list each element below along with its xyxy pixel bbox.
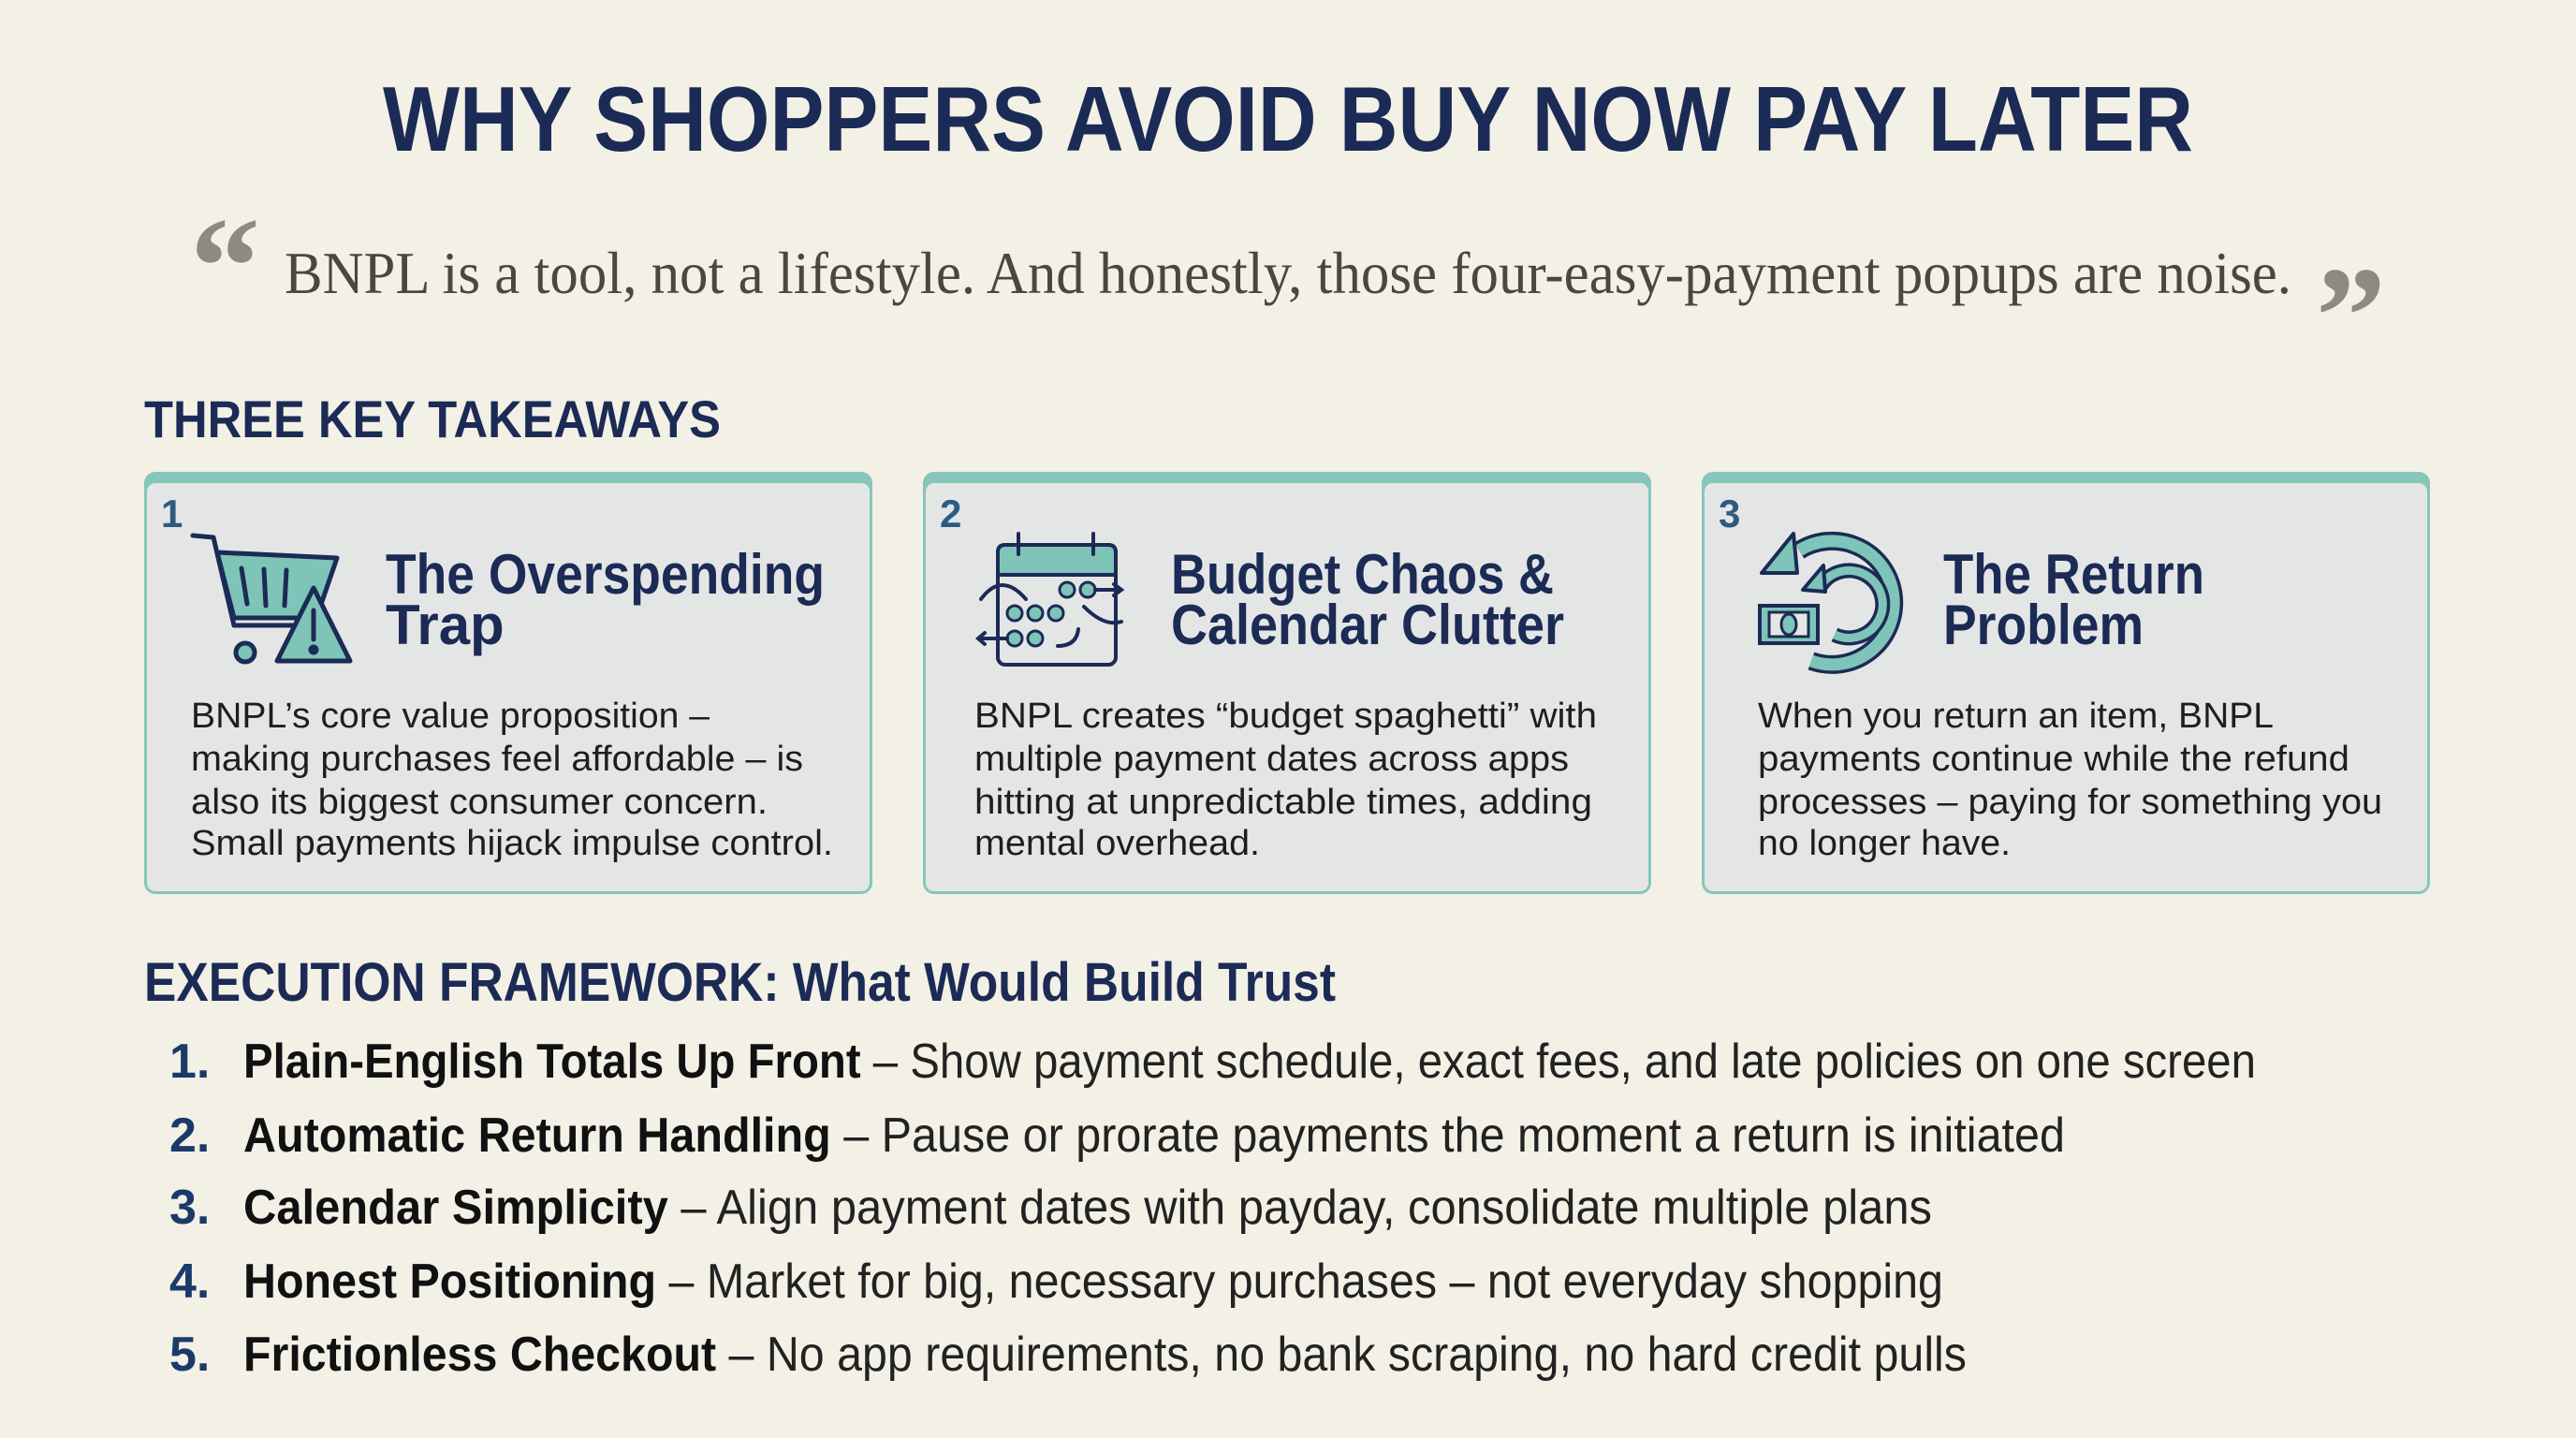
panel: return problem: [1702, 472, 2430, 894]
card body text: payments continue while the refund: [1758, 740, 2349, 779]
card body text: no longer have.: [1758, 824, 2011, 863]
numbered list: framework steps: Calendar Simplicity – Align payment dates with payday, consolidate multiple plans: [243, 1181, 1932, 1235]
card body text: also its biggest consumer concern.: [191, 783, 768, 822]
card body text: multiple payment dates across apps: [974, 740, 1569, 779]
card body text: hitting at unpredictable times, adding: [974, 783, 1592, 822]
numbered list: framework steps: [169, 1034, 2256, 1382]
numbered list: framework steps: 2.: [169, 1108, 210, 1163]
icon: calendar with scattered payments: [978, 534, 1121, 665]
numbered list: framework steps: Frictionless Checkout – No app requirements, no bank scraping, no hard credit pulls: [243, 1328, 1967, 1382]
card title: Problem: [1943, 594, 2144, 656]
icon: open quote mark: “: [190, 189, 260, 345]
numbered list: framework steps: 1.: [169, 1034, 210, 1089]
panel: budget chaos: [923, 472, 1651, 894]
card title: Budget Chaos &: [1171, 543, 1554, 606]
title: WHY SHOPPERS AVOID BUY NOW PAY LATER: [383, 67, 2193, 170]
card number 2: 2: [940, 492, 961, 536]
heading: three key takeaways: THREE KEY TAKEAWAYS: [144, 389, 721, 448]
icon: shopping cart with warning: [193, 536, 350, 662]
card body text: BNPL creates “budget spaghetti” with: [974, 697, 1597, 736]
card body text: [1758, 697, 2382, 863]
numbered list: framework steps: 3.: [169, 1181, 210, 1235]
numbered list: framework steps: Plain-English Totals Up Front – Show payment schedule, exact fees, and late policies on one screen: [243, 1034, 2256, 1089]
panel: overspending trap: [144, 472, 872, 894]
card title: The Overspending: [386, 543, 825, 606]
numbered list: framework steps: 4.: [169, 1255, 210, 1309]
numbered list: framework steps: Honest Positioning – Market for big, necessary purchases – not everyday shopping: [243, 1255, 1943, 1309]
numbered list: framework steps: 5.: [169, 1328, 210, 1382]
card body text: When you return an item, BNPL: [1758, 697, 2274, 736]
card body text: [974, 697, 1597, 863]
card body text: [191, 697, 833, 863]
icon: return arrow with money: [1760, 534, 1894, 665]
card title: The Return: [1943, 543, 2204, 606]
numbered list: framework steps: Automatic Return Handling – Pause or prorate payments the moment a return is initiated: [243, 1108, 2065, 1163]
card body text: processes – paying for something you: [1758, 783, 2382, 822]
card number 3: 3: [1719, 492, 1740, 536]
card body text: Small payments hijack impulse control.: [191, 824, 833, 863]
card body text: mental overhead.: [974, 824, 1260, 863]
card body text: making purchases feel affordable – is: [191, 740, 803, 779]
quote text: BNPL is a tool, not a lifestyle. And honestly, those four-easy-payment popups are noise.: [285, 240, 2291, 306]
card number 1: 1: [161, 492, 183, 536]
card title: Calendar Clutter: [1171, 594, 1564, 656]
heading: execution framework: EXECUTION FRAMEWORK: What Would Build Trust: [144, 952, 1336, 1013]
card body text: BNPL’s core value proposition –: [191, 697, 710, 736]
icon: close quote mark: ”: [2316, 239, 2386, 394]
card title: Trap: [386, 594, 505, 656]
quote block: [190, 189, 2386, 394]
